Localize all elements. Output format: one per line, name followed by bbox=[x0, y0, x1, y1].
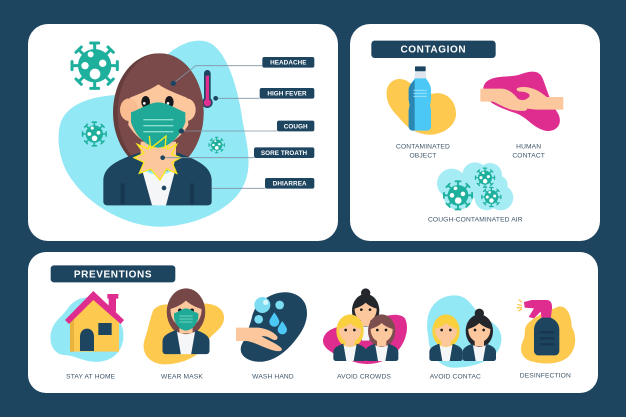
surgical mask bbox=[131, 102, 185, 148]
icon: human contact hands bbox=[480, 72, 563, 131]
caption: disinfection: DESINFECTION bbox=[520, 372, 571, 379]
pointer lines bbox=[163, 66, 277, 188]
caption: avoid contact: AVOID CONTAC bbox=[430, 374, 481, 381]
panel: contagion bbox=[350, 24, 600, 241]
icon: avoid contact bbox=[427, 295, 501, 368]
icon: thermometer bbox=[202, 70, 213, 108]
heading: preventions: PREVENTIONS bbox=[74, 270, 152, 281]
label: headache bbox=[262, 57, 314, 68]
caption: wash hand: WASH HAND bbox=[252, 374, 294, 381]
icon: avoid crowds bbox=[323, 288, 407, 364]
icon: right virus bbox=[209, 137, 224, 153]
burst top strokes bbox=[149, 136, 166, 149]
label: cough bbox=[277, 121, 314, 131]
icon: stay at home bbox=[50, 291, 124, 362]
sore throat burst bbox=[134, 144, 181, 180]
heading: contagion bbox=[371, 41, 496, 58]
caption: cough-contaminated air: COUGH-CONTAMINATED AIR bbox=[428, 216, 523, 223]
label: sore throat: SORE TROATH bbox=[261, 150, 308, 157]
woman with mask illustration bbox=[103, 53, 212, 205]
caption: human contact: CONTACT bbox=[512, 152, 545, 159]
panel: preventions bbox=[28, 252, 598, 393]
icon: contaminated bottle bbox=[387, 66, 456, 135]
caption: wear mask: WEAR MASK bbox=[161, 374, 203, 381]
symptom background blob bbox=[59, 41, 249, 227]
label: diarrhea: DHIARREA bbox=[273, 181, 307, 188]
label: headache: HEADACHE bbox=[270, 60, 307, 67]
caption: contaminated object: OBJECT bbox=[409, 152, 437, 159]
icon: disinfection spray bbox=[517, 300, 575, 363]
icon: wear mask bbox=[144, 288, 224, 364]
label: diarrhea bbox=[265, 178, 314, 189]
caption: avoid crowds: AVOID CROWDS bbox=[337, 374, 391, 381]
icon: wash hand bbox=[236, 292, 307, 362]
caption: human contact: HUMAN bbox=[516, 144, 541, 151]
label: cough: COUGH bbox=[284, 123, 308, 130]
icon: large virus bbox=[72, 43, 117, 88]
panel: symptoms bbox=[28, 24, 338, 241]
icon: left virus bbox=[83, 122, 106, 146]
label: high fever: HIGH FEVER bbox=[267, 91, 307, 98]
icon: cough cloud with viruses bbox=[437, 162, 513, 210]
caption: contaminated object: CONTAMINATED bbox=[396, 144, 450, 151]
heading: contagion: CONTAGION bbox=[400, 45, 466, 56]
label: sore throat bbox=[254, 147, 314, 158]
label: high fever bbox=[260, 88, 314, 99]
caption: stay at home: STAY AT HOME bbox=[66, 374, 116, 381]
heading: preventions bbox=[51, 265, 175, 282]
